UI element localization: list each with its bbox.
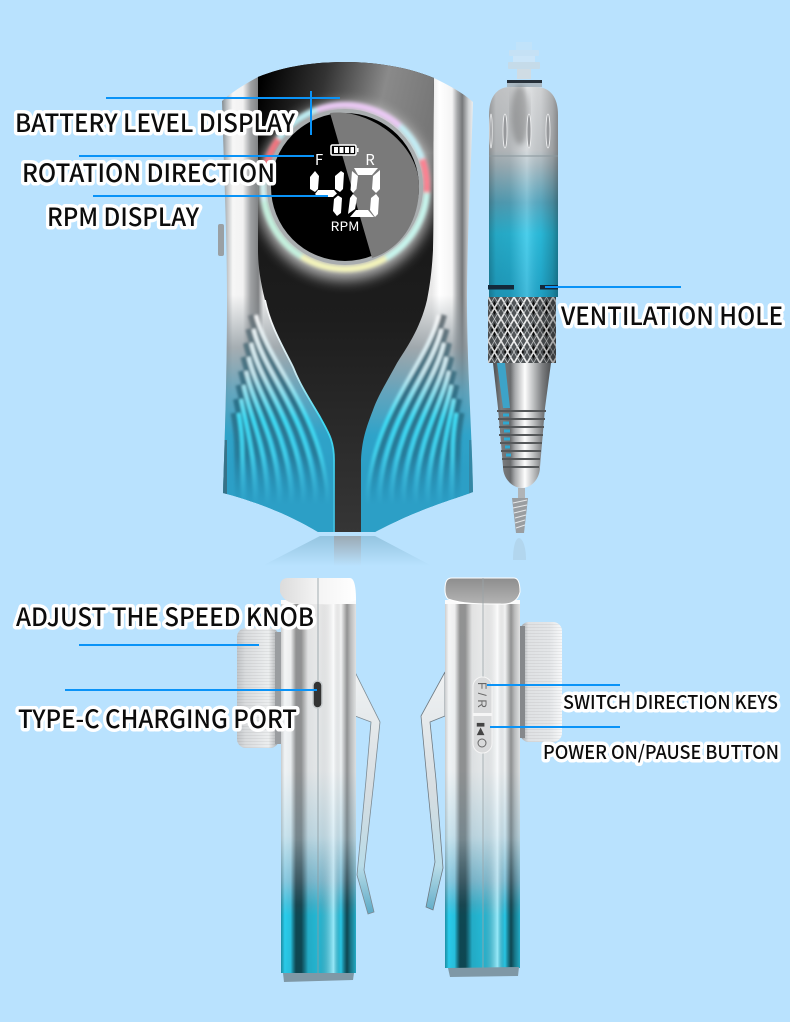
knurled grip (488, 297, 556, 363)
direction and power buttons: ▮◀ (475, 722, 486, 736)
label: rotation direction: ROTATION DIRECTION (22, 154, 275, 190)
screen reflection (330, 113, 419, 258)
belt clip (355, 672, 380, 914)
rib base fade (223, 465, 473, 532)
pen body (488, 85, 558, 297)
body (280, 578, 356, 982)
panel edge highlight (265, 300, 334, 532)
label: power on/pause button: POWER ON/PAUSE BUTTON (543, 738, 779, 765)
speed knob (237, 628, 281, 748)
side button (218, 224, 224, 256)
device reflection (262, 536, 432, 566)
drill bit (512, 488, 528, 560)
reverse label: R (365, 149, 375, 170)
ventilation slits (488, 285, 514, 290)
right side view (421, 578, 562, 977)
label: ventilation hole: VENTILATION HOLE (560, 297, 783, 333)
left wave ribs (234, 315, 327, 532)
colour light ring (229, 71, 461, 303)
RPM unit: RPM (330, 216, 360, 235)
direction and power buttons: F/R (475, 682, 489, 708)
tapered nose (493, 363, 551, 488)
forward label: F (315, 149, 323, 170)
body grooves (490, 114, 550, 148)
body (445, 578, 520, 977)
handpiece pen (488, 42, 558, 560)
left side view (237, 578, 380, 982)
label: type-c charging port: TYPE-C CHARGING PORT (18, 700, 297, 736)
black centre panel (250, 55, 440, 535)
metal shell (222, 76, 473, 532)
belt clip (421, 672, 445, 910)
right wave ribs (368, 315, 462, 532)
display screen (229, 71, 461, 303)
type-c port (313, 681, 322, 708)
battery icon (331, 145, 359, 155)
direction and power buttons (473, 677, 492, 753)
label: adjust the speed knob: ADJUST THE SPEED KNOB (16, 598, 314, 634)
label: rpm display: RPM DISPLAY (47, 198, 199, 234)
front view of the device (215, 55, 480, 540)
pen cap connector (507, 42, 542, 87)
shell blue fade (223, 300, 473, 532)
label: battery level display: BATTERY LEVEL DISPLAY (15, 104, 295, 140)
seven segment speed readout (310, 168, 380, 217)
speed knob (519, 622, 562, 742)
label: switch direction keys: SWITCH DIRECTION KEYS (563, 688, 778, 715)
